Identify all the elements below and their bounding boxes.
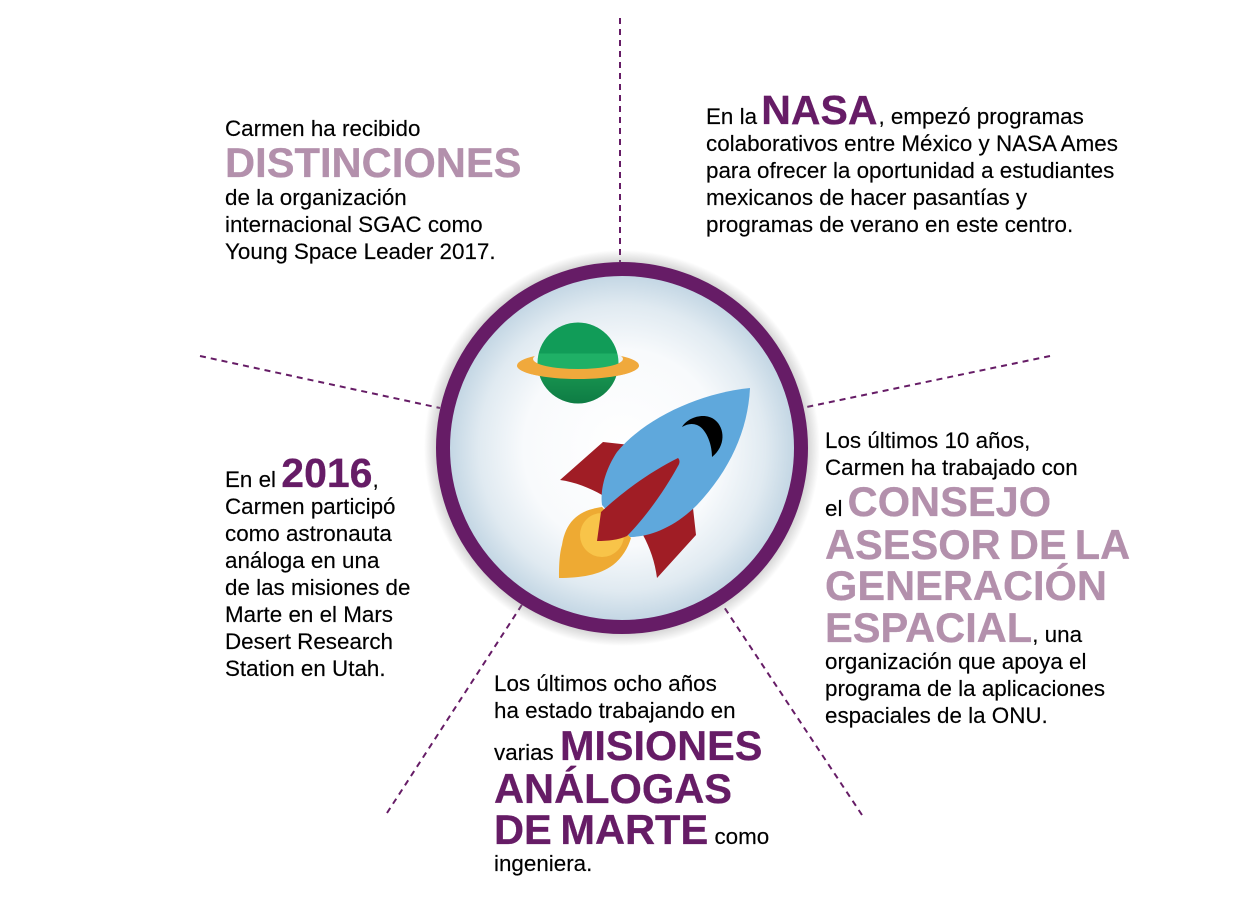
text block: NASA: para ofrecer la oportunidad a estudiantes <box>706 158 1114 183</box>
text block: misiones: DE MARTE como <box>494 806 769 853</box>
text block: consejo asesor <box>825 428 1130 728</box>
text block: distinciones: internacional SGAC como <box>225 212 483 237</box>
text block: consejo asesor: Carmen ha trabajado con <box>825 455 1078 480</box>
text block: distinciones: Young Space Leader 2017. <box>225 239 496 264</box>
text block: misiones <box>494 671 769 876</box>
text block: 2016: Carmen participó <box>225 494 396 519</box>
text block: consejo asesor: programa de la aplicaciones <box>825 676 1105 701</box>
text block: misiones: Los últimos ocho años <box>494 671 717 696</box>
text block: consejo asesor: espaciales de la ONU. <box>825 703 1048 728</box>
text block: 2016: de las misiones de <box>225 575 410 600</box>
text block: NASA: mexicanos de hacer pasantías y <box>706 185 1027 210</box>
text block: distinciones: Carmen ha recibido <box>225 116 420 141</box>
text block: consejo asesor: organización que apoya el <box>825 649 1086 674</box>
text block: misiones: ingeniera. <box>494 851 592 876</box>
text block: distinciones: de la organización <box>225 185 407 210</box>
text block: 2016: Marte en el Mars <box>225 602 393 627</box>
text block: 2016: como astronauta <box>225 521 392 546</box>
text block: 2016 <box>225 450 410 681</box>
text block: distinciones <box>225 116 521 264</box>
text block: misiones: varias MISIONES <box>494 723 762 769</box>
text block: consejo asesor: Los últimos 10 años, <box>825 428 1030 453</box>
text block: 2016: análoga en una <box>225 548 379 573</box>
text block: consejo asesor: ESPACIAL, una <box>825 604 1082 651</box>
icon: rocket <box>559 388 750 578</box>
text block: 2016: Desert Research <box>225 629 393 654</box>
text block: misiones: ha estado trabajando en <box>494 698 736 723</box>
text block: consejo asesor: el CONSEJO <box>825 478 1051 525</box>
text block: 2016: En el 2016, <box>225 450 379 496</box>
text block: NASA: programas de verano en este centro. <box>706 212 1073 237</box>
icon: planet <box>517 322 639 404</box>
text block: consejo asesor: ASESOR DE LA <box>825 521 1130 568</box>
text block: NASA: colaborativos entre México y NASA Ames <box>706 131 1118 156</box>
text block: consejo asesor: GENERACIÓN <box>825 562 1107 609</box>
circle badge <box>424 250 820 646</box>
text block: 2016: Station en Utah. <box>225 656 386 681</box>
text block: misiones: ANÁLOGAS <box>494 765 732 812</box>
text block: distinciones: DISTINCIONES <box>225 139 521 186</box>
text block: NASA <box>706 87 1118 237</box>
text block: NASA: En la NASA, empezó programas <box>706 87 1084 133</box>
